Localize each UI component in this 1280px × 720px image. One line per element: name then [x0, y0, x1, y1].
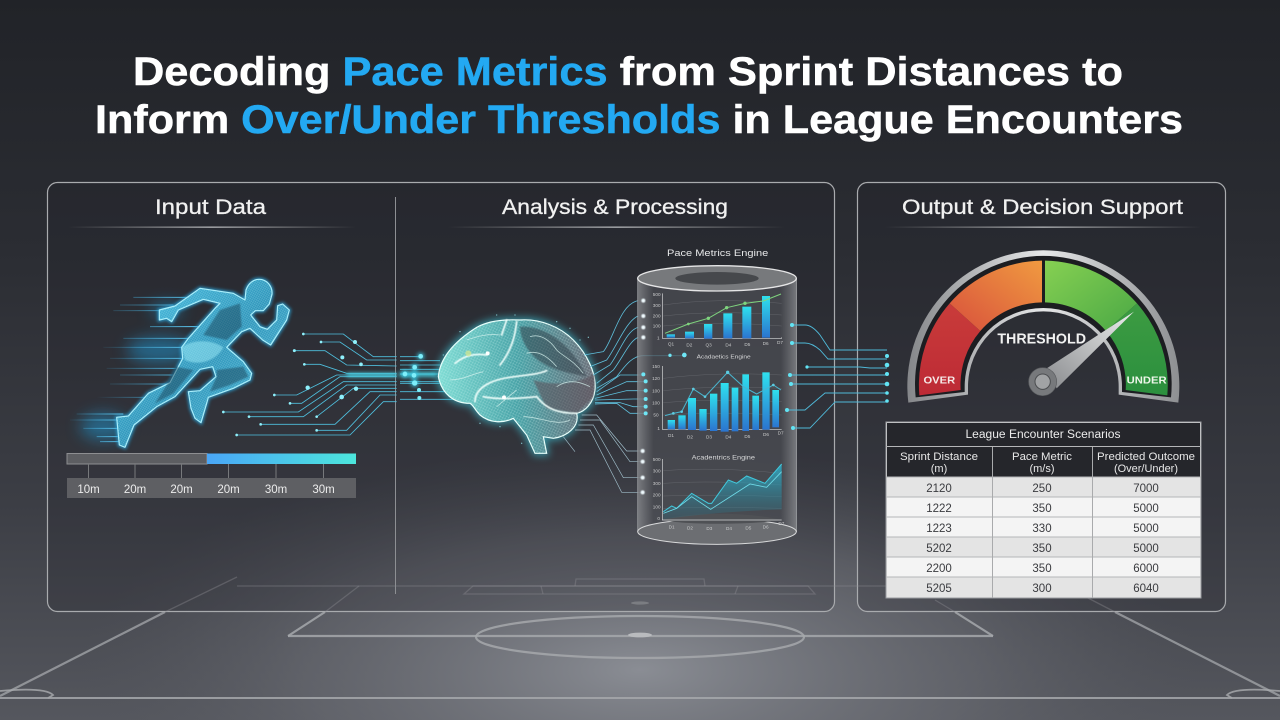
table rows: 350 — [1032, 503, 1052, 515]
pace metrics engine cylinder — [638, 248, 797, 544]
table rows: 6000 — [1133, 563, 1159, 575]
chart 3: D4 — [726, 526, 732, 531]
distance progress scale: 30m — [265, 484, 287, 496]
threshold gauge: UNDER — [1127, 376, 1167, 387]
needle — [1047, 312, 1134, 388]
chart 2: 120 — [652, 376, 660, 381]
table header: Pace Metric — [1012, 451, 1073, 463]
threshold gauge — [907, 250, 1179, 403]
chart 2: D1 — [668, 433, 674, 438]
chart 1: 300 — [653, 303, 661, 308]
chart 1: D7 — [777, 340, 783, 345]
circuit lines from runner — [222, 333, 397, 436]
chart 2: 100 — [652, 400, 660, 405]
heading: input data: Input Data — [155, 196, 266, 219]
distance progress scale: 20m — [124, 484, 146, 496]
links brain to engine — [584, 301, 683, 413]
chart 1: Q1 — [668, 341, 675, 346]
table rows: 2200 — [926, 563, 952, 575]
chart 1: 1 — [657, 335, 660, 340]
sprinter illustration — [70, 279, 289, 447]
chart 1: Q3 — [706, 343, 712, 348]
table rows: 5000 — [1133, 523, 1159, 535]
gauge labels: OVER — [923, 376, 956, 387]
chart 3: D6 — [763, 524, 769, 529]
chart 3: 300 — [653, 469, 661, 474]
chart 3: 0 — [657, 516, 660, 521]
chart 3: 300 — [653, 481, 661, 486]
table rows: 7000 — [1133, 483, 1159, 495]
chart 2: D2 — [687, 434, 693, 439]
table rows: 5000 — [1133, 543, 1159, 555]
input links — [400, 357, 457, 399]
chart 3: D7 — [778, 521, 785, 526]
chart 2: D7 — [778, 430, 784, 435]
distance progress scale: 30m — [312, 484, 335, 496]
table rows: 350 — [1032, 543, 1052, 555]
chart 2: D5 — [744, 434, 751, 439]
chart 2: D3 — [706, 435, 712, 440]
chart 2: 150 — [652, 364, 660, 369]
brain illustration and data links — [400, 301, 683, 492]
gauge rim — [907, 250, 1179, 403]
segment: orange — [950, 261, 1042, 331]
chart 2: 50 — [653, 413, 659, 418]
heading: analysis and processing: Analysis & Processing — [502, 196, 728, 219]
chart 1 — [653, 292, 783, 348]
table rows: 1222 — [926, 503, 952, 515]
chart 3 — [653, 457, 785, 531]
table header: Sprint Distance — [900, 451, 978, 463]
chart 3: D1 — [669, 525, 675, 530]
title: Inform Over/Under Thresholds in League Encounters — [95, 98, 1183, 142]
chart 1: 200 — [653, 313, 661, 318]
speed lines — [70, 297, 207, 442]
chart 3: 200 — [653, 493, 661, 498]
chart 2: 100 — [652, 388, 660, 393]
glow behind sprinter — [80, 303, 193, 440]
table rows: 330 — [1032, 523, 1052, 535]
chart 1: 100 — [653, 324, 661, 329]
table: league encounter scenarios — [886, 422, 1201, 598]
chart 2 — [652, 364, 784, 440]
distance progress scale: 20m — [170, 484, 193, 496]
chart 1 caption: Acadaetics Engine — [697, 354, 751, 360]
table header — [900, 451, 1195, 475]
dots around brain — [443, 314, 589, 444]
chart 1: D5 — [744, 342, 751, 347]
segment: under dark green — [1106, 303, 1168, 395]
panel: output frame — [858, 182, 1226, 612]
table header: Predicted Outcome — [1097, 451, 1195, 463]
chart 3: 500 — [653, 457, 661, 462]
chart 2: 1 — [657, 426, 660, 431]
segment: over red — [919, 303, 980, 395]
chart 3: D2 — [687, 525, 693, 530]
chart 1: D6 — [763, 341, 769, 346]
table header: (Over/Under) — [1114, 463, 1178, 475]
table rows — [926, 483, 1159, 595]
chart 3: D5 — [745, 525, 752, 530]
chart 3: 100 — [653, 504, 661, 509]
chart 2: D4 — [725, 435, 732, 440]
chart 1: D2 — [686, 343, 693, 348]
pitch sidelines — [0, 612, 1280, 696]
threshold gauge: THRESHOLD — [997, 330, 1086, 347]
heading: output and decision support: Output & Decision Support — [902, 196, 1183, 219]
pitch lines seen through panels — [165, 577, 1115, 612]
table rows: 5202 — [926, 543, 952, 555]
engine label: Pace Metrics Engine — [667, 248, 768, 258]
chart 3: D3 — [706, 526, 713, 531]
chart 1: 500 — [653, 292, 661, 297]
distance progress scale — [67, 454, 356, 498]
title — [95, 50, 1183, 142]
table rows: 250 — [1032, 483, 1052, 495]
table header: (m/s) — [1029, 463, 1055, 475]
segment: light green — [1045, 261, 1137, 331]
table rows: 5000 — [1133, 503, 1159, 515]
chart 3 caption: Acadentrics Engine — [692, 455, 756, 462]
chart 2: D6 — [763, 432, 769, 437]
table rows: 1223 — [926, 523, 952, 535]
table rows: 2120 — [926, 483, 952, 495]
engine connector nodes — [641, 299, 645, 494]
links engine to gauge — [785, 323, 889, 430]
panel: input and analysis frame — [48, 182, 834, 612]
football pitch floor — [0, 612, 1280, 698]
table rows: 300 — [1032, 583, 1052, 595]
chart 1: D4 — [725, 343, 732, 348]
table rows: 5205 — [926, 583, 952, 595]
table title: League Encounter Scenarios — [966, 429, 1121, 441]
table rows: 350 — [1032, 563, 1052, 575]
table rows: 6040 — [1133, 583, 1159, 595]
title: Decoding Pace Metrics from Sprint Distances to — [133, 50, 1123, 94]
table header: (m) — [931, 463, 947, 475]
distance progress scale: 10m — [77, 484, 100, 496]
distance progress scale: 20m — [217, 484, 240, 496]
